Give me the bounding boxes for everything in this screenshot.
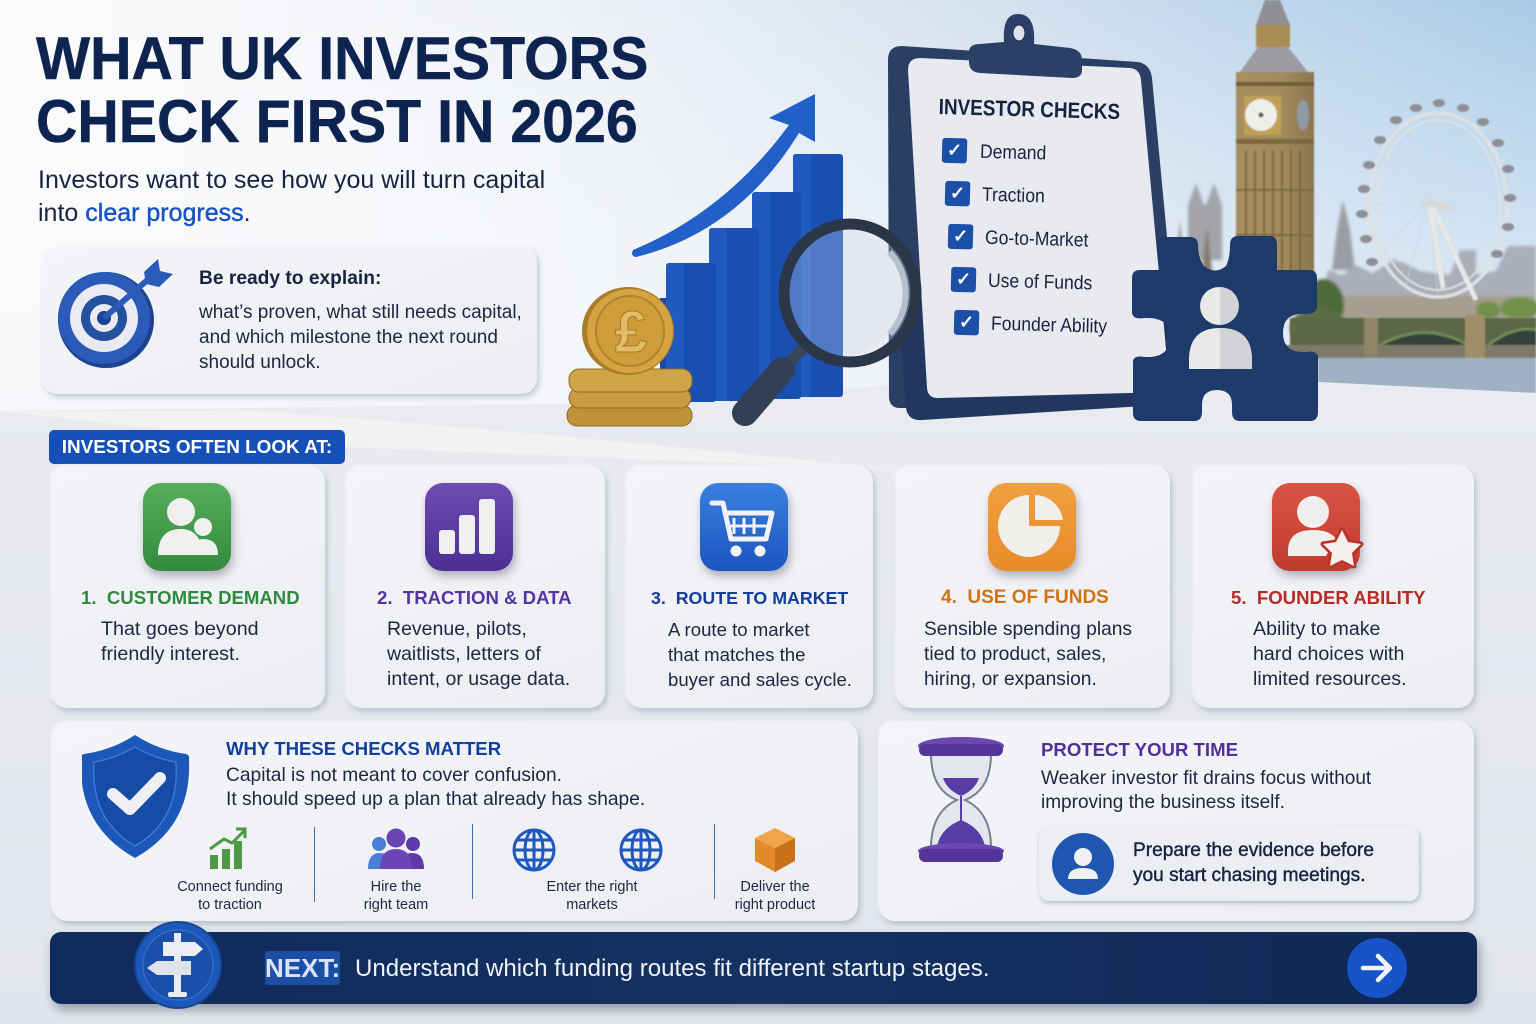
label bbox=[546, 879, 638, 913]
subtitle bbox=[38, 166, 545, 227]
panel: customer demand bbox=[51, 466, 325, 708]
check: use of funds bbox=[950, 266, 1093, 294]
check: demand: Demand bbox=[980, 141, 1047, 165]
title bbox=[36, 25, 648, 154]
label bbox=[735, 879, 816, 913]
text: explanation bbox=[199, 302, 522, 373]
label: right product bbox=[735, 897, 815, 913]
icon: globes bbox=[512, 828, 662, 872]
text: Ability to make bbox=[1253, 618, 1380, 640]
icon: shield bbox=[82, 735, 190, 858]
heading: 1. CUSTOMER DEMAND bbox=[81, 587, 300, 608]
text: Sensible spending plans bbox=[924, 619, 1132, 640]
panel: use of funds bbox=[896, 466, 1170, 708]
text bbox=[1041, 768, 1371, 813]
text: you start chasing meetings. bbox=[1133, 864, 1365, 886]
checklist bbox=[942, 138, 1108, 338]
check: founder ability: Founder Ability bbox=[991, 313, 1107, 338]
item: enter markets bbox=[512, 828, 662, 913]
text bbox=[924, 619, 1132, 690]
icon: signpost bbox=[133, 920, 223, 1010]
tag: investors often look at bbox=[49, 430, 345, 464]
text bbox=[668, 619, 852, 690]
check: traction: Traction bbox=[982, 184, 1045, 207]
item: connect funding bbox=[177, 828, 283, 913]
label bbox=[364, 879, 428, 913]
icon: pound coins: £ bbox=[615, 300, 647, 365]
label: Enter the right bbox=[546, 879, 638, 895]
text: A route to market bbox=[668, 619, 810, 640]
London Eye bbox=[1356, 99, 1516, 300]
text: waitlists, letters of bbox=[387, 643, 541, 665]
text: It should speed up a plan that already has shape. bbox=[226, 788, 645, 810]
text: explanation: and which milestone the next round bbox=[199, 327, 498, 348]
panel: be ready to explain bbox=[42, 246, 537, 394]
icon: hourglass bbox=[918, 737, 1004, 862]
label: Hire the bbox=[371, 879, 421, 895]
check: traction: ✓ bbox=[950, 183, 965, 203]
panel: traction and data bbox=[346, 466, 605, 708]
check: go-to-market: ✓ bbox=[953, 226, 968, 246]
floor bbox=[0, 382, 1536, 1024]
icon: arrow button bbox=[1347, 938, 1407, 998]
subtitle: into clear progress. bbox=[38, 199, 251, 227]
check: go-to-market: Go-to-Market bbox=[985, 227, 1089, 251]
text: Capital is not meant to cover confusion. bbox=[226, 765, 562, 786]
banner: next bbox=[50, 932, 1477, 1004]
text: That goes beyond bbox=[101, 618, 259, 640]
tag: investors often look at: INVESTORS OFTEN LOOK AT: bbox=[62, 437, 332, 458]
text bbox=[1253, 618, 1407, 690]
icon: bars bbox=[425, 483, 513, 571]
heading: WHY THESE CHECKS MATTER bbox=[226, 738, 501, 759]
heading: 4. USE OF FUNDS bbox=[941, 587, 1109, 608]
check: use of funds: ✓ bbox=[956, 269, 971, 289]
text: Weaker investor fit drains focus without bbox=[1041, 768, 1371, 789]
icon: pie chart bbox=[988, 483, 1076, 571]
text: limited resources. bbox=[1253, 668, 1407, 690]
icon: puzzle piece with person bbox=[1132, 236, 1318, 421]
panel: founder ability bbox=[1193, 466, 1474, 708]
text: friendly interest. bbox=[101, 643, 240, 665]
check: founder ability bbox=[954, 310, 1108, 338]
heading: 5. FOUNDER ABILITY bbox=[1231, 587, 1426, 608]
icon: founder with star bbox=[1272, 483, 1360, 571]
panel: clipboard investor checks bbox=[888, 14, 1170, 420]
callout: prepare the evidence bbox=[1039, 826, 1419, 901]
text: buyer and sales cycle. bbox=[668, 669, 852, 690]
icon: team bbox=[368, 828, 424, 869]
text: intent, or usage data. bbox=[387, 668, 570, 690]
heading: 3. ROUTE TO MARKET bbox=[651, 588, 848, 608]
text: explanation: what’s proven, what still needs capital, bbox=[199, 302, 522, 323]
icon: magnifying glass bbox=[732, 218, 922, 426]
text: explanation: should unlock. bbox=[199, 352, 320, 373]
heading: 2. TRACTION & DATA bbox=[377, 587, 572, 608]
icon: people bbox=[143, 483, 231, 571]
check: go-to-market bbox=[948, 224, 1089, 251]
title: WHAT UK INVESTORS bbox=[36, 25, 648, 92]
check: traction bbox=[944, 180, 1045, 207]
icon: box bbox=[755, 828, 795, 872]
bridge and river bbox=[1285, 315, 1536, 394]
label bbox=[177, 879, 283, 913]
text: hard choices with bbox=[1253, 643, 1404, 665]
text: improving the business itself. bbox=[1041, 792, 1285, 813]
text: Prepare the evidence before bbox=[1133, 840, 1374, 861]
label: Connect funding bbox=[177, 879, 283, 895]
panel: why these checks matter bbox=[52, 722, 858, 921]
title: CHECK FIRST IN 2026 bbox=[36, 88, 638, 154]
bar chart with growth arrow bbox=[632, 94, 843, 402]
label: right team bbox=[364, 897, 428, 913]
check: use of funds: Use of Funds bbox=[988, 270, 1093, 294]
icon: person bbox=[1052, 833, 1114, 895]
text: that matches the bbox=[668, 644, 805, 665]
text: next label: NEXT: bbox=[265, 953, 340, 983]
label: Deliver the bbox=[740, 879, 810, 895]
heading: PROTECT YOUR TIME bbox=[1041, 739, 1238, 760]
text: Revenue, pilots, bbox=[387, 618, 527, 640]
text: hiring, or expansion. bbox=[924, 669, 1097, 690]
text: be ready: Be ready to explain: bbox=[199, 268, 381, 289]
text: tied to product, sales, bbox=[924, 644, 1106, 665]
text bbox=[387, 618, 570, 690]
distant skyline bbox=[1175, 183, 1536, 348]
panel: protect your time bbox=[879, 722, 1474, 921]
text: next message: Understand which funding routes fit different startup stages. bbox=[355, 955, 990, 982]
label: markets bbox=[566, 897, 618, 913]
subtitle: Investors want to see how you will turn capital bbox=[38, 166, 545, 194]
icon: growth chart bbox=[209, 828, 246, 869]
item: deliver product bbox=[735, 828, 816, 913]
Elizabeth Tower bbox=[1236, 0, 1314, 287]
text bbox=[226, 765, 645, 810]
text: investor checks heading: INVESTOR CHECKS bbox=[938, 94, 1120, 124]
icon: cart bbox=[700, 483, 788, 571]
check: demand bbox=[942, 138, 1047, 165]
icon: pound coins bbox=[566, 287, 692, 426]
text bbox=[101, 618, 259, 665]
icon: target with arrow bbox=[58, 259, 173, 368]
label: to traction bbox=[198, 897, 262, 913]
panel: route to market bbox=[626, 466, 873, 708]
item: hire team bbox=[364, 828, 428, 913]
check: demand: ✓ bbox=[947, 140, 962, 160]
check: founder ability: ✓ bbox=[959, 312, 974, 332]
text bbox=[1132, 840, 1374, 886]
